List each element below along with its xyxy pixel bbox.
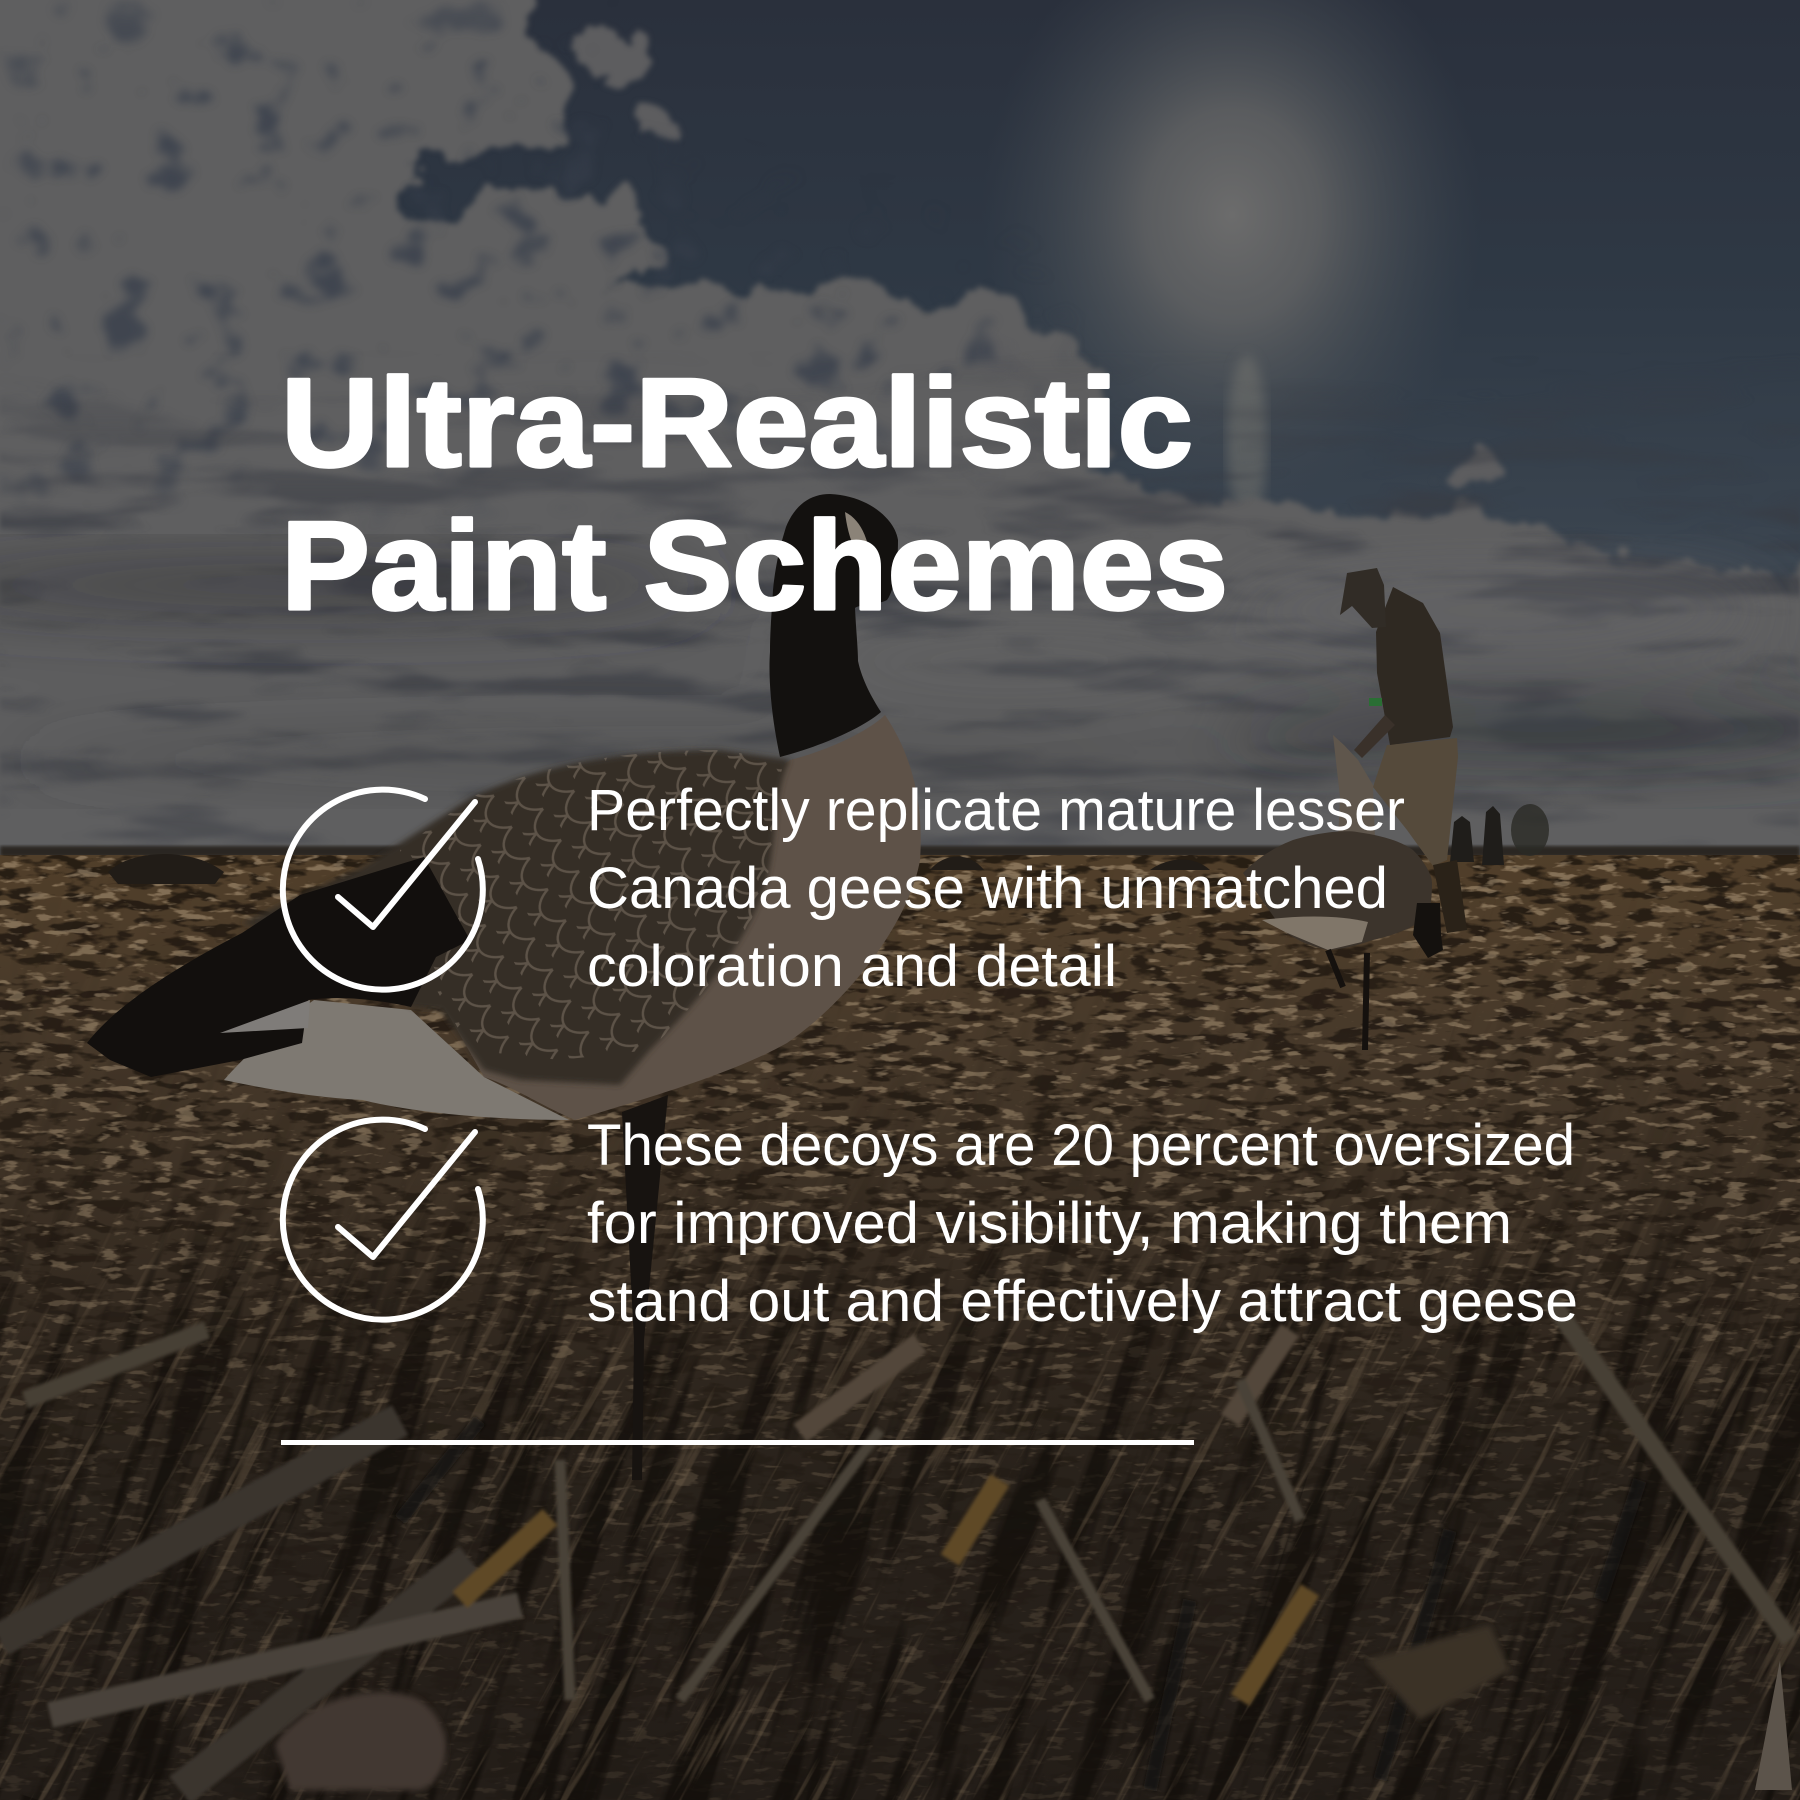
goose white wing sliver [220, 1000, 310, 1033]
feature 2 text: These decoys are 20 percent oversized [587, 1113, 1575, 1178]
foreground corn stalks [0, 1300, 1790, 1790]
sun glow [982, 0, 1482, 515]
hunter cap and face [1340, 568, 1386, 628]
goose under-body [440, 715, 921, 1120]
hunter trousers [1373, 738, 1458, 866]
distant decoy silhouettes [108, 854, 1210, 884]
feature 1 text: Canada geese with unmatched [587, 856, 1388, 921]
feature 2 text: for improved visibility, making them [587, 1191, 1512, 1256]
feature 2 text [587, 1113, 1578, 1334]
hunter boot [1433, 860, 1467, 933]
field [0, 855, 1800, 1800]
small cloud puffs [585, 38, 1492, 500]
gaps in the clouds [6, 0, 998, 495]
goose cheek patch [845, 512, 870, 572]
goose tail [87, 857, 470, 1077]
feature 1 text: coloration and detail [587, 934, 1117, 999]
decoy stakes [1328, 950, 1367, 1050]
feature 1 text: Perfectly replicate mature lesser [587, 778, 1405, 843]
sky [0, 0, 1800, 860]
title line 2: Paint Schemes [281, 495, 1228, 636]
feature 2 text: stand out and effectively attract geese [587, 1269, 1578, 1334]
rear decoy belly [1262, 916, 1368, 950]
rear decoy body [1243, 831, 1432, 950]
rear decoy [1243, 831, 1443, 1050]
feature 2: oversized decoys [283, 1113, 1578, 1334]
goose belly [224, 1000, 569, 1120]
goose neck and head [769, 494, 898, 757]
rock-like stalk pieces [275, 1625, 1510, 1790]
title line 1: Ultra-Realistic [281, 352, 1193, 493]
light stalk bottom right [1755, 1660, 1792, 1790]
feature 1 text [587, 778, 1405, 999]
hunter [1340, 568, 1467, 933]
goose wing feathers [242, 750, 790, 1085]
stubble dark texture [0, 855, 1800, 1386]
decoy held by hunter [1333, 735, 1375, 840]
far stubble highlights [0, 855, 1800, 1800]
hunter arm [1354, 715, 1395, 758]
icon: check mark in open circle [283, 790, 483, 990]
near stalk highlights [0, 1219, 1800, 1800]
horizon tree line [0, 846, 1800, 857]
lens flare [1227, 355, 1267, 525]
dark and light sky shading [0, 557, 1800, 786]
goose leg stake [622, 1095, 668, 1480]
rear decoy feet [1413, 903, 1443, 958]
title [281, 352, 1228, 636]
main goose decoy [87, 494, 921, 1480]
near stalk shadows [0, 1098, 1800, 1800]
divider line [281, 1440, 1194, 1445]
feature 1: realistic coloration [283, 778, 1405, 999]
goose feather scallops [400, 750, 785, 1060]
distant tree [1511, 804, 1549, 856]
distant hunters and trees [1450, 806, 1504, 865]
icon: check mark in open circle [283, 1120, 483, 1320]
green decoy tag [1369, 698, 1382, 706]
cloud mass [0, 0, 1800, 870]
hunter jacket [1376, 587, 1453, 745]
dark horizontal cloud bands [0, 404, 1800, 846]
